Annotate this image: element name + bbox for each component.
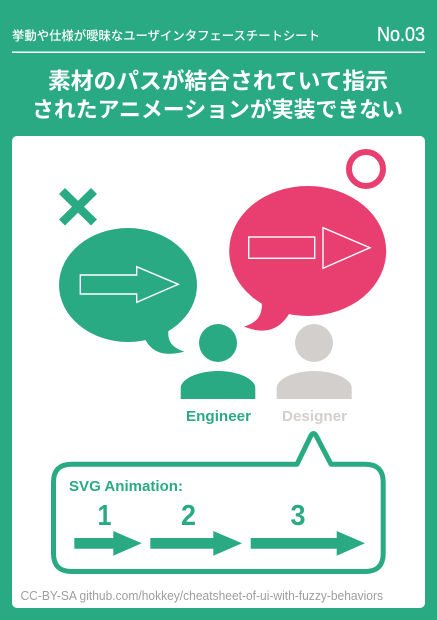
header: series name and number [12, 24, 425, 53]
step 2 [150, 500, 242, 556]
speech bubble: designer's correct separated shapes [229, 186, 386, 331]
sheet number: No.03 [377, 24, 425, 46]
rectangle outline [249, 237, 315, 258]
person: designer [277, 324, 352, 425]
step 3: 3 [290, 500, 306, 532]
footer: license credit: CC-BY-SA github.com/hokkey/cheatsheet-of-ui-with-fuzzy-behaviors [20, 588, 383, 603]
step 3 [251, 500, 365, 556]
icon: circle mark [349, 152, 383, 186]
step 1: 1 [98, 500, 112, 532]
main title [32, 68, 403, 122]
panel: white card [12, 136, 425, 608]
label: Engineer: Engineer [186, 409, 251, 425]
triangle outline [323, 228, 370, 268]
label: Designer: Designer [282, 409, 347, 425]
callout heading: SVG Animation: [69, 479, 183, 495]
main title: 素材のパスが結合されていて指示 [48, 68, 388, 94]
step 1 [74, 500, 142, 556]
series title: 挙動や仕様が曖昧なユーザインタフェースチートシート [12, 28, 320, 43]
icon: cross mark [62, 191, 94, 222]
merged arrow outline [80, 267, 178, 302]
main title: されたアニメーションが実装できない [32, 97, 403, 122]
speech bubble: engineer's wrong arrow [59, 228, 197, 354]
person: engineer [181, 324, 255, 425]
step 2: 2 [181, 500, 196, 532]
callout: SVG animation steps [54, 434, 383, 572]
